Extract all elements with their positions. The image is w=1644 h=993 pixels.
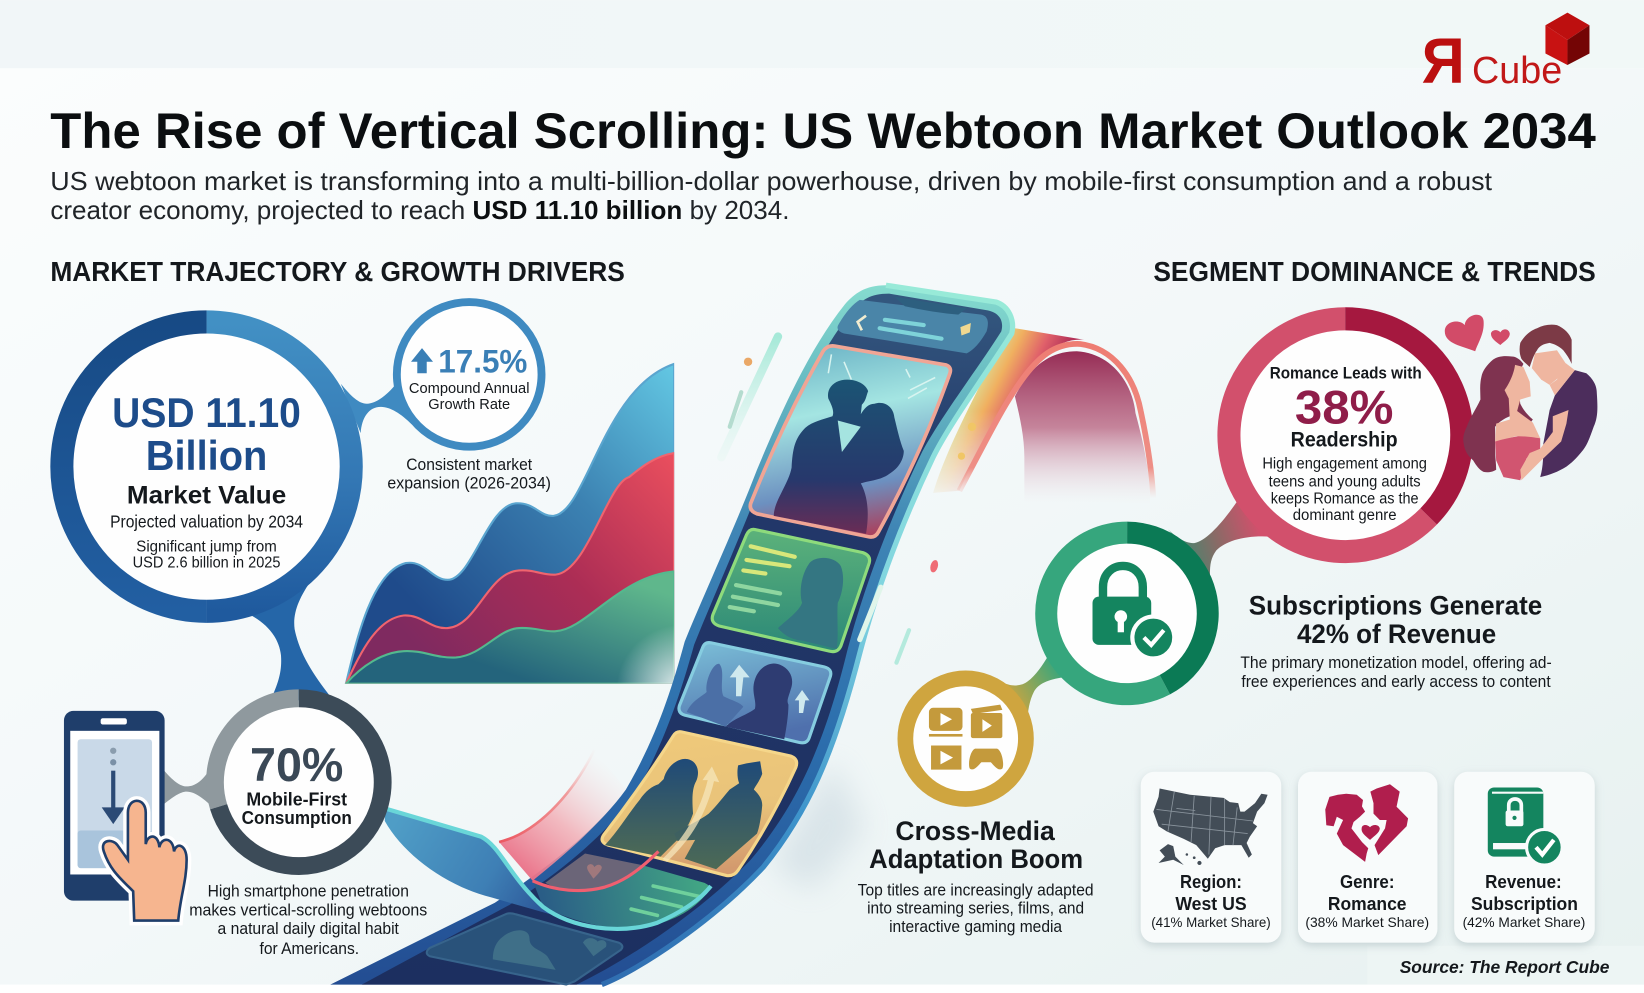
card: genre: Romance <box>1328 893 1407 914</box>
panel: market value ring: Significant jump from <box>136 539 277 556</box>
icon: hearts <box>1445 315 1510 351</box>
connector: romance to subscriptions <box>1168 501 1273 575</box>
app header <box>837 297 988 353</box>
heading: segment dominance: SEGMENT DOMINANCE & TRENDS <box>1153 256 1596 287</box>
heading: market trajectory: MARKET TRAJECTORY & GROWTH DRIVERS <box>50 256 625 287</box>
subtitle: US webtoon market is transforming into a multi-billion-dollar powerhouse, driven by mobile-first consumption and a robust <box>50 166 1493 196</box>
panel: romance ring: Romance Leads with <box>1270 365 1422 383</box>
panel: mobile-first ring: Mobile-First <box>246 788 348 809</box>
card: revenue <box>1454 772 1595 943</box>
panel: market value ring: Market Value <box>127 481 286 509</box>
text: consistent expansion <box>387 456 551 493</box>
card: revenue: Subscription <box>1471 893 1578 914</box>
curling page <box>385 750 711 929</box>
text: smartphone penetration: for Americans. <box>259 939 359 958</box>
text: subscriptions: Subscriptions Generate <box>1249 589 1542 620</box>
panel: market value ring: USD 11.10 <box>112 389 301 436</box>
icon: lock with check <box>1093 566 1174 658</box>
card: genre: Genre: <box>1340 871 1394 892</box>
text: cross-media: into streaming series, films, and <box>867 899 1084 917</box>
panel: CAGR ring: 17.5% <box>438 343 527 379</box>
connector: market value to mobile-first <box>250 579 333 700</box>
strip outer edge <box>330 285 1013 985</box>
area chart <box>346 364 682 687</box>
card: region: Region: <box>1180 871 1242 892</box>
logo: RCube <box>1422 13 1589 97</box>
frame 3: blue panel <box>679 643 831 743</box>
icon: romance couple <box>1325 784 1408 862</box>
frame 1: romance panel <box>750 346 950 537</box>
subtitle: creator economy, projected to reach USD 11.10 billion by 2034. <box>50 195 789 225</box>
panel: market value ring: Billion <box>146 432 267 479</box>
back arch of ribbon <box>933 327 1153 503</box>
logo: RCube: Я <box>1422 25 1465 97</box>
text: smartphone penetration <box>189 881 427 958</box>
text: cross-media <box>858 815 1094 936</box>
panel: romance ring: High engagement among <box>1262 456 1427 473</box>
panel: market value ring <box>62 322 351 611</box>
frame 6: dim panel <box>427 913 622 985</box>
connector: market value to CAGR <box>341 384 412 433</box>
text: cross-media: Cross-Media <box>895 815 1056 846</box>
text: cross-media: Adaptation Boom <box>869 843 1083 874</box>
subtitle <box>50 166 1493 225</box>
card: region <box>1141 772 1281 943</box>
text: subscriptions: 42% of Revenue <box>1297 618 1496 649</box>
panel: CAGR ring: Compound Annual <box>409 380 529 397</box>
icon: US map <box>1153 788 1268 865</box>
icon: up arrow <box>411 348 433 373</box>
strip dark inner <box>362 294 1002 985</box>
panel: mobile-first ring: Consumption <box>242 807 352 828</box>
illustration: couple <box>1463 325 1597 480</box>
text: subscriptions: The primary monetization model, offering ad- <box>1240 654 1552 672</box>
connector: mobile ring to phone <box>163 760 215 809</box>
panel: romance ring: teens and young adults <box>1269 474 1421 491</box>
text: smartphone penetration: High smartphone penetration <box>208 881 409 900</box>
panel: mobile-first ring: 70% <box>250 738 343 791</box>
decorative streaks <box>721 337 976 663</box>
text: smartphone penetration: a natural daily digital habit <box>218 919 399 938</box>
card: genre: (38% Market Share) <box>1305 914 1429 930</box>
panel: mobile-first ring <box>215 698 383 866</box>
text: cross-media: Top titles are increasingly adapted <box>858 881 1094 899</box>
card: region: West US <box>1175 893 1247 914</box>
card: revenue: Revenue: <box>1485 871 1562 892</box>
icon: book lock with check <box>1488 787 1562 865</box>
panel: CAGR ring <box>397 302 542 447</box>
text: smartphone penetration: makes vertical-scrolling webtoons <box>189 900 427 919</box>
card: genre <box>1298 772 1437 943</box>
text: subscriptions: free experiences and early access to content <box>1241 673 1551 691</box>
connector: subscriptions to cross-media <box>1001 655 1063 723</box>
panel: cross-media ring <box>905 678 1026 799</box>
panel: market value ring: Projected valuation by 2034 <box>110 511 303 531</box>
panel: romance ring: Readership <box>1291 429 1398 452</box>
text: consistent expansion: expansion (2026-2034) <box>387 475 551 493</box>
frame 4: yellow panel <box>602 732 797 876</box>
text: consistent expansion: Consistent market <box>406 456 533 474</box>
panel: subscription ring <box>1046 533 1208 694</box>
card: revenue: (42% Market Share) <box>1463 914 1585 930</box>
text: cross-media: interactive gaming media <box>889 918 1063 936</box>
logo: RCube: Cube <box>1472 49 1562 91</box>
scrolling film strip <box>330 285 1153 985</box>
panel: romance ring: 38% <box>1295 381 1393 434</box>
strip right rim <box>602 285 1013 985</box>
panel: romance ring <box>1229 319 1462 552</box>
text: subscriptions <box>1240 589 1552 691</box>
icon: phone with scrolling hand <box>64 711 187 921</box>
card: region: (41% Market Share) <box>1151 914 1271 930</box>
title: The Rise of Vertical Scrolling: US Webtoon Market Outlook 2034 <box>50 102 1596 159</box>
source note: Source: The Report Cube <box>1400 957 1609 977</box>
panel: market value ring: USD 2.6 billion in 2025 <box>133 554 281 571</box>
icon: media tiles <box>929 705 1003 770</box>
frame 2: green panel <box>712 529 870 652</box>
panel: romance ring: dominant genre <box>1293 507 1397 524</box>
panel: CAGR ring: Growth Rate <box>428 396 510 413</box>
panel: romance ring: keeps Romance as the <box>1271 490 1419 507</box>
